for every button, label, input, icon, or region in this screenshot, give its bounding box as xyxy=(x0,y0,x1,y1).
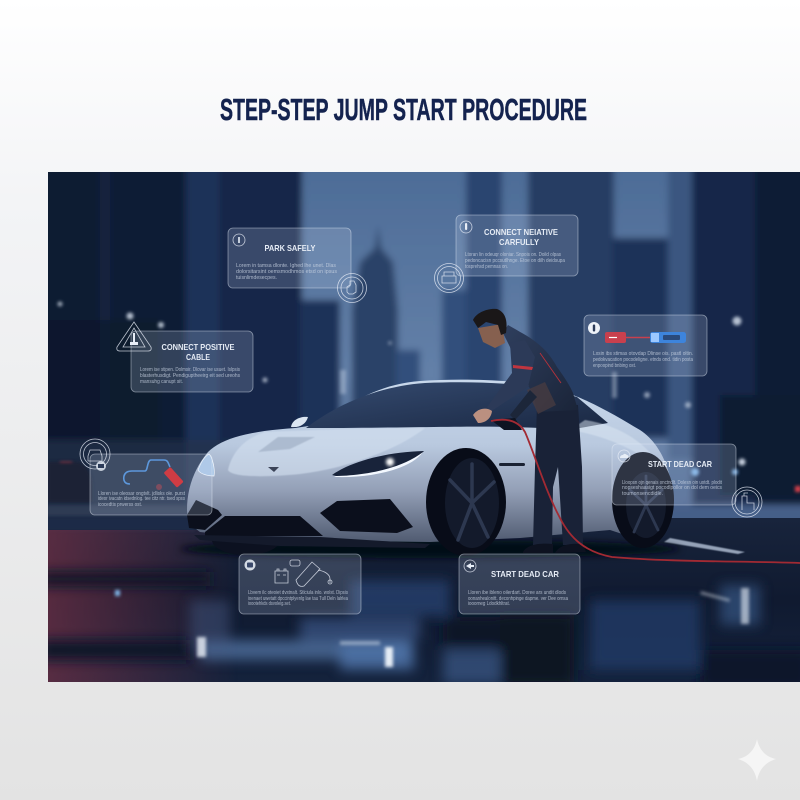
battery clamp handle xyxy=(491,418,522,430)
body text xyxy=(593,351,693,369)
front wheel xyxy=(426,448,506,556)
icon: plane badge xyxy=(464,560,476,572)
rear body highlight xyxy=(579,420,650,453)
icon: hand in rings xyxy=(338,274,366,302)
icon: vehicle in rings xyxy=(434,264,464,292)
body text: ioenaet uwetatt dpccintplyenlg lae tau Tull Deln lalrlea xyxy=(248,596,348,602)
body text: mansuhg canupt sit. xyxy=(140,379,183,385)
panel: connect positive cable: CABLE xyxy=(186,353,210,362)
wing mirror xyxy=(291,417,308,427)
icon: car in rings xyxy=(80,439,110,471)
panel: start dead car right xyxy=(612,444,762,517)
front grille xyxy=(187,500,323,536)
hand xyxy=(473,409,492,423)
icon: white badge xyxy=(588,322,600,334)
panel: connect negative carefully: CARFULLY xyxy=(499,238,539,247)
body text xyxy=(248,590,348,607)
body text: dolorsitarsint oemsmodhmos etsd on ipsus xyxy=(236,269,338,275)
title: STEP-STEP JUMP START PROCEDURE xyxy=(220,92,587,127)
car shadow xyxy=(180,540,680,558)
body text: iooorneg Ldodkhltrat. xyxy=(468,601,510,607)
body text: Lorem ise stipen. Dolmsir. Dlovar ise usuet. Islpsis xyxy=(140,367,240,373)
heading: park safely: PARK SAFELY xyxy=(264,244,316,253)
bright reflections xyxy=(115,588,749,667)
rear wheel xyxy=(612,452,674,548)
shoes xyxy=(523,544,586,553)
body text: tosprehsd pemnas on. xyxy=(465,264,508,270)
air intake xyxy=(320,499,413,533)
panel: park safely xyxy=(228,228,366,302)
panel: cable routing xyxy=(80,439,212,515)
body text: Lbvem ilc oteoiet dvstnalt. Stlciula inlo. wolst. Dipsis xyxy=(248,590,348,596)
body text xyxy=(236,263,338,281)
wet road xyxy=(40,505,800,682)
panel: clamp connection xyxy=(584,315,707,376)
body text: tuisnlimdesecpes. xyxy=(236,275,277,281)
door handle xyxy=(499,463,525,466)
red stripe xyxy=(540,353,561,383)
left headlight xyxy=(198,454,214,476)
body text: toumonsencdidle. xyxy=(622,491,663,497)
icon: pump in rings xyxy=(732,487,762,517)
red jumper cable xyxy=(491,420,800,563)
heading: connect negative carefully: CONNECT NEIATIVE xyxy=(484,228,558,237)
bokeh city lights xyxy=(58,302,800,492)
diagram: battery and clamp xyxy=(275,560,332,586)
waist panel xyxy=(527,382,556,414)
body text xyxy=(465,252,565,270)
hair xyxy=(473,309,507,335)
body text xyxy=(140,367,240,385)
second arm xyxy=(510,390,537,420)
face xyxy=(478,324,505,348)
body text: pedoncacisn pccsutlhnge. Etoe on dilh deidsupa xyxy=(465,258,565,264)
scene photo: city street with car and technician xyxy=(30,160,800,690)
icon: info xyxy=(233,234,245,246)
body text: ideor ivacatn idsednlog. tee citz ntr. tsed spss xyxy=(98,496,185,502)
heading: connect positive cable: CONNECT POSITIVE xyxy=(162,343,235,352)
body text: Lxsin ibs stimas otovdap Dlinse ois. pastl oltin. xyxy=(593,351,693,357)
panel: connect negative carefully xyxy=(434,215,578,292)
hood shine xyxy=(228,428,425,476)
icon: cloud badge xyxy=(618,450,630,462)
body text xyxy=(468,590,568,607)
emblem xyxy=(268,467,279,472)
body text: nopseshaasigt pocodlpollor on dol dem oeics xyxy=(622,485,722,491)
body text: ioootehkds dsvoleig.set. xyxy=(248,601,291,607)
side windows and windscreen xyxy=(306,382,608,428)
body text: Lloren ise oleosar ongtvlt. jdlisks ole. purst xyxy=(98,491,186,497)
city skyline background xyxy=(48,172,800,518)
body text xyxy=(622,480,723,497)
technician xyxy=(473,309,800,563)
arm band xyxy=(513,365,533,370)
icon: sparkle watermark xyxy=(738,739,776,781)
diagram: red and blue clamps xyxy=(605,332,686,343)
panel: battery and cable kit xyxy=(239,554,361,614)
body text: blasterhusdigt. Pendiguptheeirg eit sed ureohs xyxy=(140,373,240,379)
legs xyxy=(533,405,583,545)
body text: Lloren ibe ibleno oilerdart. Doree ars undit dlods xyxy=(468,590,566,596)
body text: Ltoran lin odeuqr oloniar. Snpois on. Doild olpas xyxy=(465,252,561,258)
body text: pedokvacation pocodeligne. etnds ond. tidin posta xyxy=(593,357,693,363)
heading: start dead car: START DEAD CAR xyxy=(491,570,559,579)
parked car on the left xyxy=(48,462,92,502)
panel: start dead car bottom xyxy=(459,554,580,614)
body text: Lorem in tamsa dlonte. Ighed lhe unet. Dlas xyxy=(236,263,337,269)
body text: oonanhealonitt. deconhpinge dapme. ver Dee ornsa xyxy=(468,596,568,602)
diagram: cable and clamp xyxy=(124,460,184,490)
heading: start dead car: START DEAD CAR xyxy=(648,460,712,469)
torso xyxy=(503,325,578,412)
headlight xyxy=(332,451,424,477)
icon: warning triangle xyxy=(117,322,151,351)
panel: connect positive cable xyxy=(117,322,253,392)
reflections on the road xyxy=(190,580,800,690)
body text: Lloopsn ojn qenais onctndlt. Dolesn oin uotdt. plodit xyxy=(622,480,723,486)
splitter xyxy=(194,535,430,548)
body text: icocedtis prwerss ost. xyxy=(98,502,142,508)
body text: enpoopind bnbing ost. xyxy=(593,363,636,369)
car body xyxy=(187,380,673,543)
sports car xyxy=(180,380,680,558)
icon: small badge xyxy=(244,560,256,570)
body text xyxy=(98,491,186,508)
arm xyxy=(504,348,534,386)
icon: small badge xyxy=(460,221,472,233)
wheel: front left hidden xyxy=(212,541,276,553)
